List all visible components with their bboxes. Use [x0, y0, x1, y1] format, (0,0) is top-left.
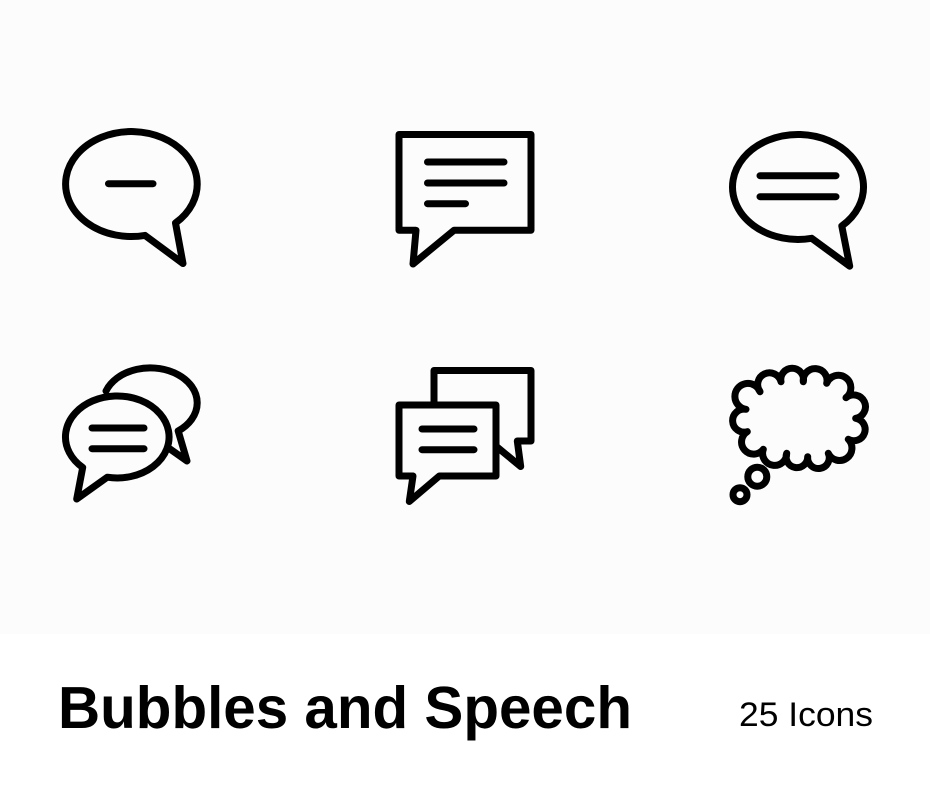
icon: round speech bubble with two text lines: [733, 134, 864, 266]
icon count label: 25 Icons: [739, 696, 873, 734]
icon: two overlapping round speech bubbles: [65, 368, 197, 499]
icon: two overlapping square speech bubbles: [399, 370, 531, 502]
icon: round speech bubble with minus: [66, 132, 197, 264]
icon: square speech bubble with three text lines: [399, 134, 531, 264]
icon: thought cloud with two small circles: [733, 368, 865, 502]
title: Bubbles and Speech: [58, 675, 632, 741]
